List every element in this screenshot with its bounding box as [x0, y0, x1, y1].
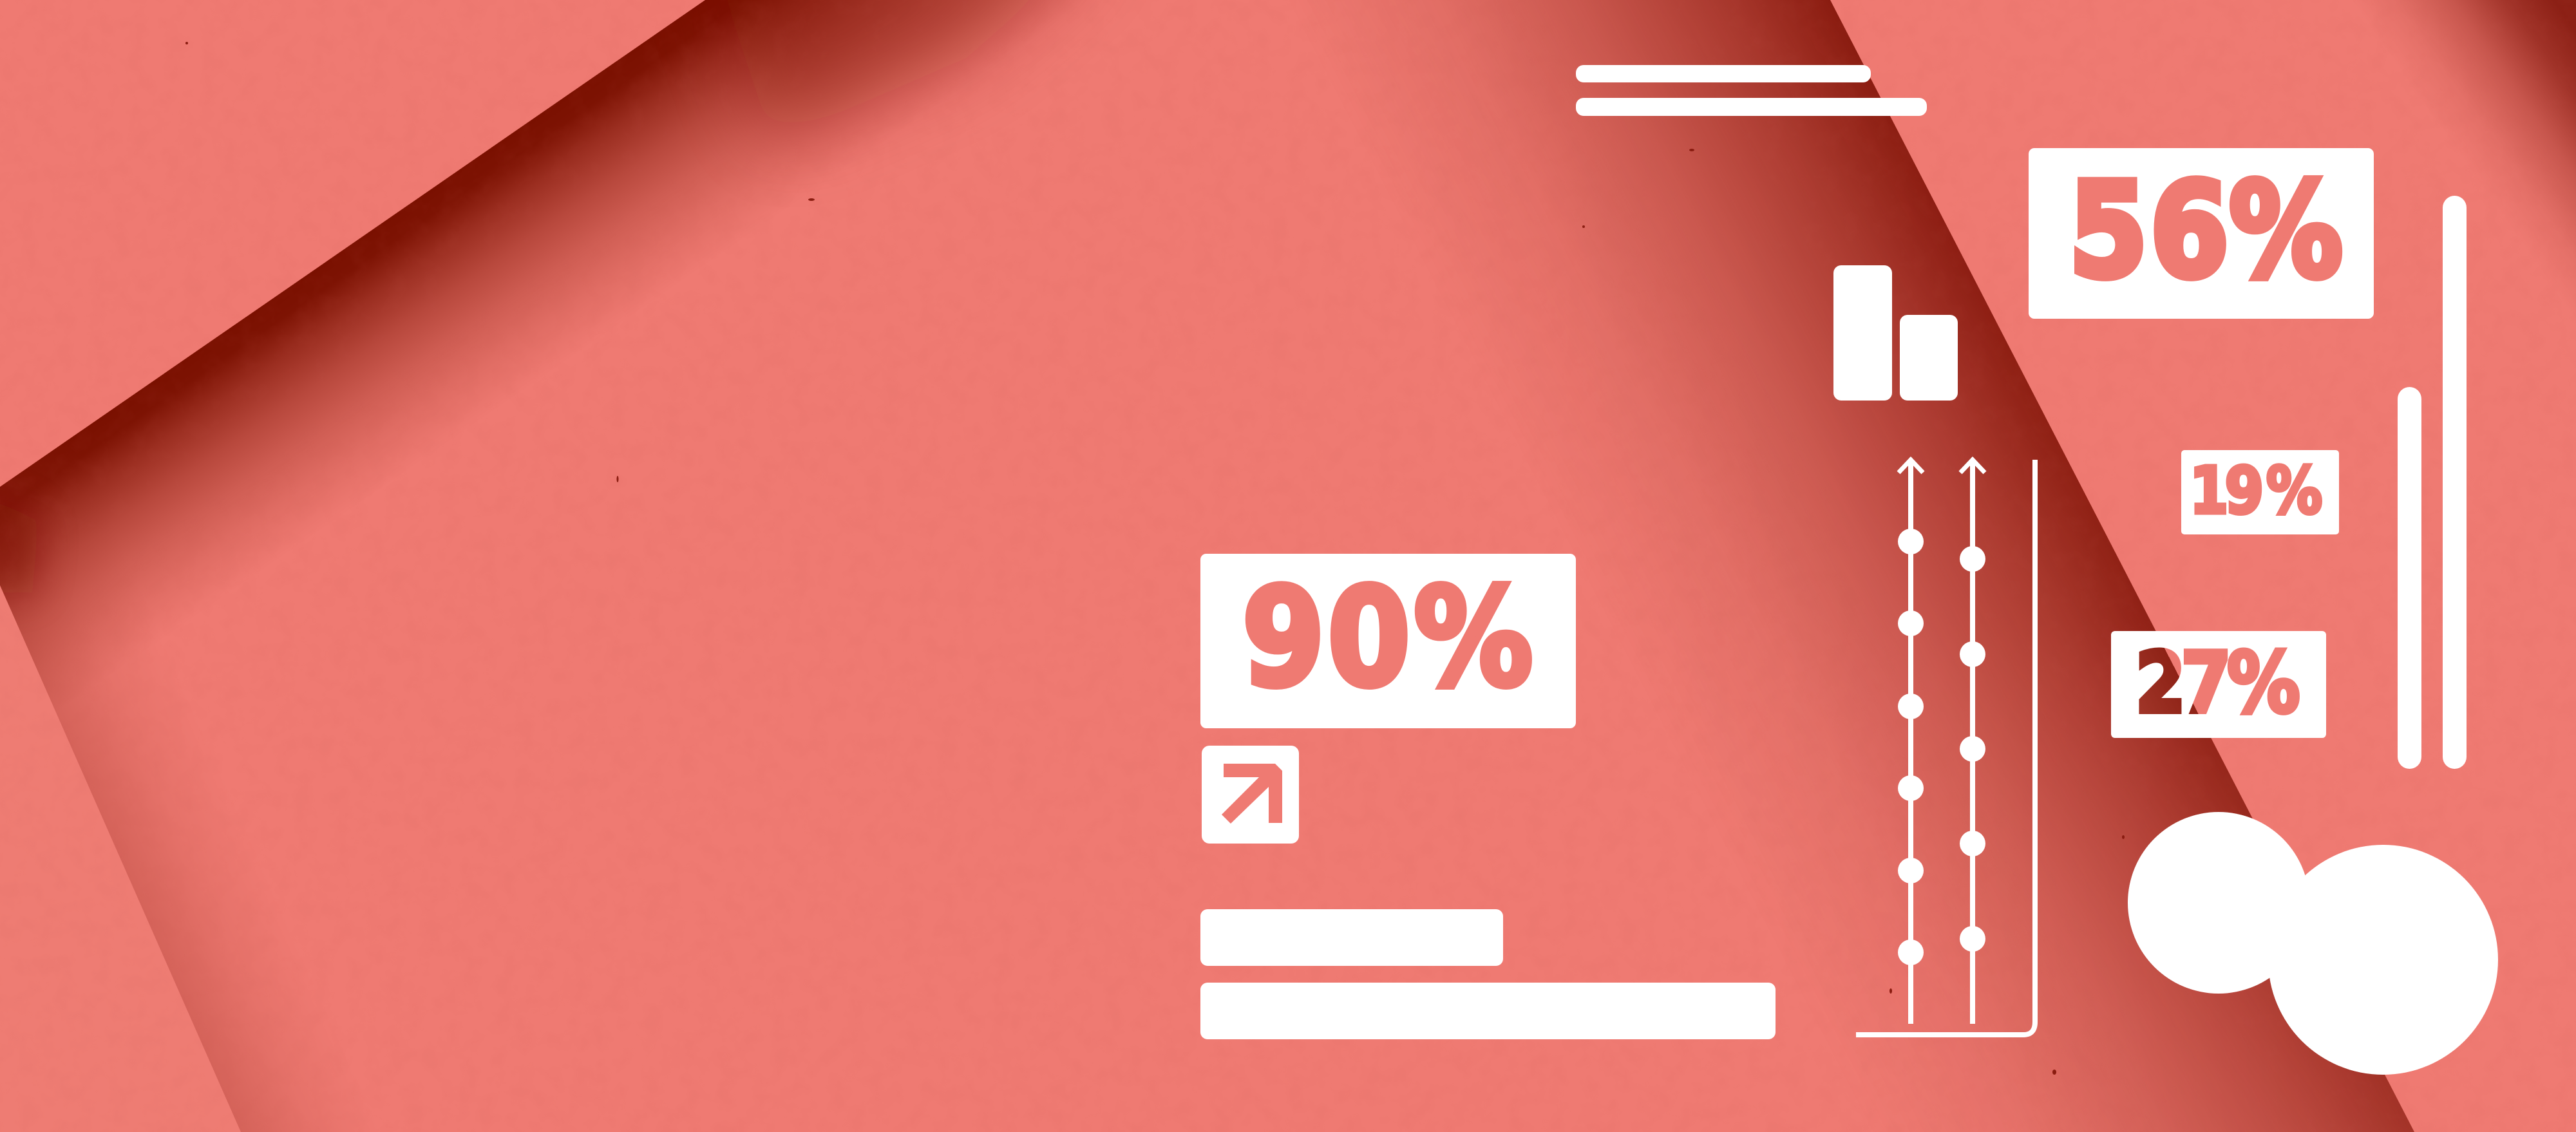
- right sheet: [1830, 0, 2576, 1132]
- icon: bar chart: [1833, 265, 1958, 401]
- icon: up-right arrow: [1202, 746, 1299, 844]
- dark left-edge corner: [0, 489, 39, 592]
- chart axis frame: [1856, 460, 2035, 1035]
- bottom-left sheet: [0, 585, 241, 1132]
- stat box: 27%: 27%: [2136, 634, 2300, 731]
- arrow series 1: [1898, 460, 1924, 1024]
- stat box: 27%: [2111, 631, 2326, 738]
- paper specks: [185, 42, 2125, 1075]
- shadow widening at top of fold: [705, 0, 1108, 142]
- overlapping circles: [2128, 812, 2498, 1075]
- stat box: 56%: 56%: [2069, 155, 2343, 307]
- top-left sheet: [0, 0, 705, 487]
- arrow series 2: [1960, 460, 1985, 1024]
- shadow left of right sheet: [1376, 0, 2414, 1132]
- arrow dot chart: [1856, 460, 2035, 1035]
- top-right corner shadow: [2351, 0, 2576, 322]
- top heading placeholder bars: [1576, 65, 1927, 116]
- stat box: 90%: 90%: [1242, 559, 1533, 717]
- stat box: 19%: 19%: [2190, 454, 2322, 529]
- horizontal bars: [1200, 909, 1776, 1039]
- vertical bars: [2398, 196, 2467, 769]
